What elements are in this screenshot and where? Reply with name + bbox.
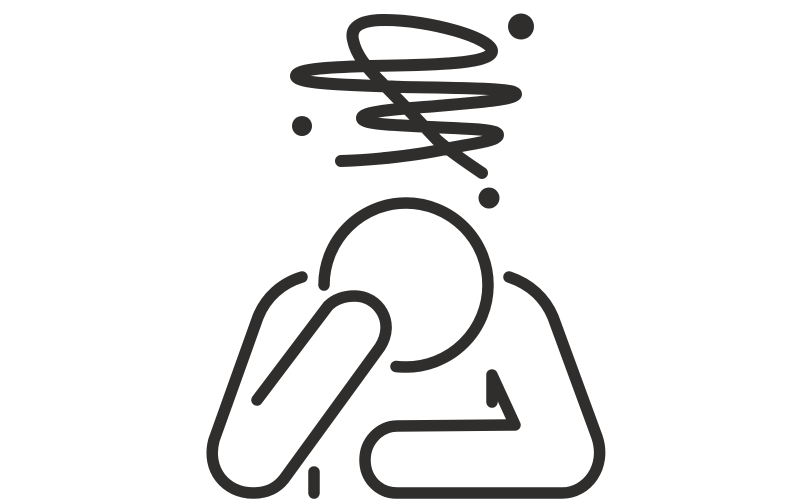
icon: dot top right xyxy=(508,14,534,40)
icon: right arm resting xyxy=(365,277,600,493)
icon: head xyxy=(324,203,488,367)
icon: scribble of confusion xyxy=(296,20,516,173)
icon: dot below scribble xyxy=(478,188,500,208)
icon: dot left xyxy=(292,116,312,136)
icon: small vertical tick xyxy=(308,472,320,493)
icon: left arm raised to head xyxy=(212,277,386,493)
